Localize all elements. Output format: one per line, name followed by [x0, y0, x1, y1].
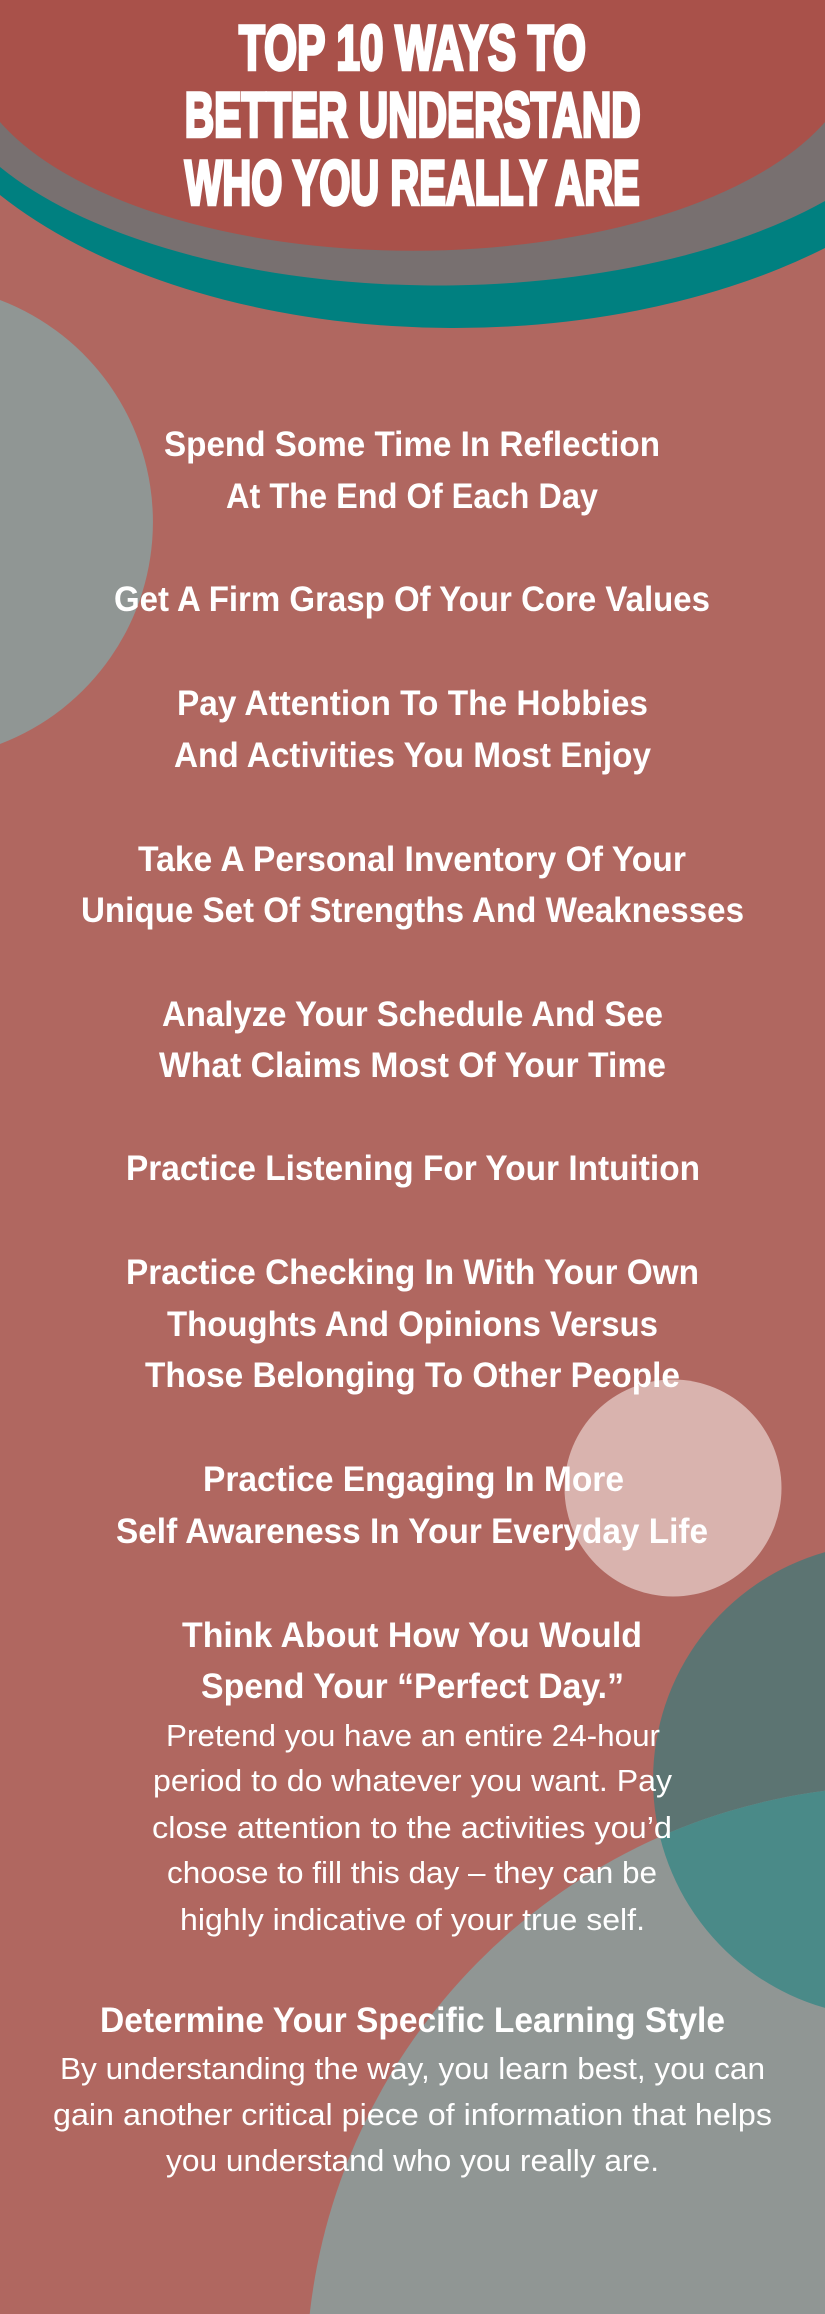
title: TOP 10 WAYS TO: [239, 13, 586, 83]
tip 9 description: close attention to the activities you’d: [152, 1810, 672, 1845]
header teal arc: [0, 0, 825, 328]
tip 9 description: highly indicative of your true self.: [180, 1902, 645, 1937]
tip 8: self awareness: [116, 1460, 708, 1551]
tip 1: reflection: [164, 425, 660, 516]
tip 2: core values: Get A Firm Grasp Of Your Core Values: [114, 580, 710, 619]
overlap of teal and grey circles: [660, 1790, 825, 2008]
tip 9 description: Pretend you have an entire 24-hour: [166, 1718, 660, 1753]
tip 8: self awareness: Self Awareness In Your Everyday Life: [116, 1512, 708, 1551]
tip 6: intuition: Practice Listening For Your Intuition: [126, 1149, 700, 1188]
tip 7: own thoughts: Those Belonging To Other People: [145, 1356, 680, 1395]
tip 3: hobbies: [174, 684, 652, 775]
tip 9 description: choose to fill this day – they can be: [167, 1855, 657, 1890]
header red dome: [0, 0, 825, 251]
tip 5: schedule: Analyze Your Schedule And See: [162, 995, 663, 1034]
tip 5: schedule: [159, 995, 666, 1085]
tip 3: hobbies: And Activities You Most Enjoy: [174, 736, 652, 775]
tip 10 description: By understanding the way, you learn best, you can: [60, 2051, 765, 2086]
tip 9 heading: Think About How You Would: [182, 1616, 642, 1655]
decorative circle: bottom right large grey: [310, 1791, 825, 2314]
tip 7: own thoughts: Thoughts And Opinions Versus: [167, 1305, 658, 1344]
tip 8: self awareness: Practice Engaging In More: [203, 1460, 624, 1499]
tip 9 heading: [182, 1616, 642, 1706]
tip 9 heading: Spend Your “Perfect Day.”: [201, 1667, 624, 1706]
tip 10 description: gain another critical piece of information that helps: [53, 2097, 772, 2132]
tip 7: own thoughts: Practice Checking In With Your Own: [126, 1253, 699, 1292]
tip 9: perfect day: [152, 1616, 673, 1937]
header grey arc: [0, 0, 825, 285]
title: [185, 13, 641, 218]
decorative circle: right dark teal: [653, 1552, 825, 2008]
tip 3: hobbies: Pay Attention To The Hobbies: [177, 684, 648, 723]
tip 1: reflection: Spend Some Time In Reflection: [164, 425, 660, 464]
tip 10 heading: Determine Your Specific Learning Style: [100, 2001, 725, 2040]
tip 4: personal inventory: Take A Personal Inventory Of Your: [138, 840, 686, 879]
tip 9 description: [152, 1718, 673, 1937]
tip 7: own thoughts: [126, 1253, 699, 1395]
tip 1: reflection: At The End Of Each Day: [226, 477, 598, 516]
tip 10: learning style: [53, 2001, 772, 2178]
decorative circle: light pink: [564, 1380, 782, 1596]
tip 5: schedule: What Claims Most Of Your Time: [159, 1046, 666, 1085]
tip 4: personal inventory: Unique Set Of Strengths And Weaknesses: [81, 891, 744, 930]
decorative circle: left grey: [0, 300, 153, 744]
tip 4: personal inventory: [81, 840, 744, 930]
tip 10 description: [53, 2051, 772, 2178]
tip 10 description: you understand who you really are.: [166, 2143, 659, 2178]
tip 9 description: period to do whatever you want. Pay: [153, 1763, 673, 1798]
